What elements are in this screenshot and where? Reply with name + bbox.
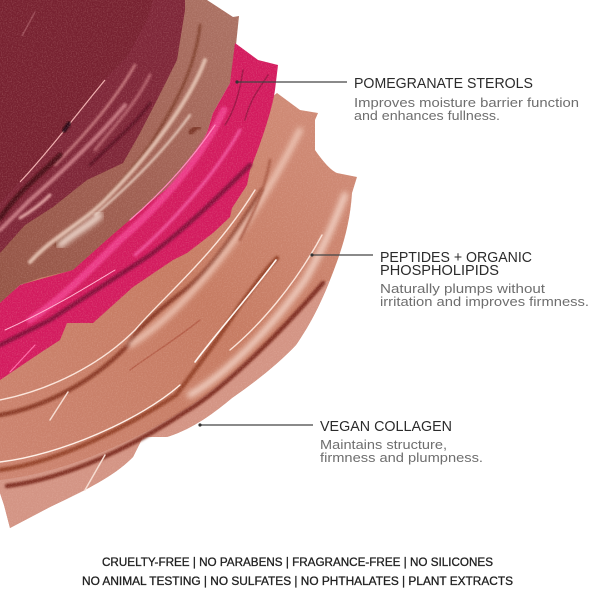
swatch: deep maroon — [0, 0, 153, 203]
heading: POMEGRANATE STEROLS — [354, 76, 533, 92]
footer claims: NO ANIMAL TESTING | NO SULFATES | NO PHTHALATES | PLANT EXTRACTS — [82, 576, 513, 588]
heading: PHOSPHOLIPIDS — [380, 263, 499, 279]
leader line — [310, 253, 373, 257]
heading — [380, 250, 532, 279]
leader line — [198, 423, 313, 427]
heading: PEPTIDES + ORGANIC — [380, 250, 532, 266]
description: Naturally plumps without — [380, 281, 546, 296]
footer claims: CRUELTY-FREE | NO PARABENS | FRAGRANCE-FREE | NO SILICONES — [102, 557, 493, 569]
leader line — [235, 80, 347, 84]
description: and enhances fullness. — [354, 108, 500, 123]
callout: pomegranate sterols — [235, 76, 579, 123]
swatch: mid maroon streaked — [0, 0, 185, 253]
description: firmness and plumpness. — [320, 450, 483, 465]
callout: peptides — [310, 250, 589, 309]
creases — [0, 130, 345, 490]
description: Maintains structure, — [320, 437, 447, 452]
swatch: peach and nude — [0, 93, 357, 528]
description: irritation and improves firmness. — [380, 294, 589, 309]
description — [354, 95, 579, 123]
nude lower band — [0, 280, 330, 528]
description — [320, 437, 483, 465]
swatch: rosy brown — [0, 0, 239, 303]
description: Improves moisture barrier function — [354, 95, 579, 110]
callout: vegan collagen — [198, 419, 483, 465]
lipstick swatches — [0, 0, 357, 528]
heading: VEGAN COLLAGEN — [320, 419, 452, 435]
description — [380, 281, 589, 309]
swatch: hot pink — [0, 43, 278, 380]
footer claims — [82, 557, 513, 588]
